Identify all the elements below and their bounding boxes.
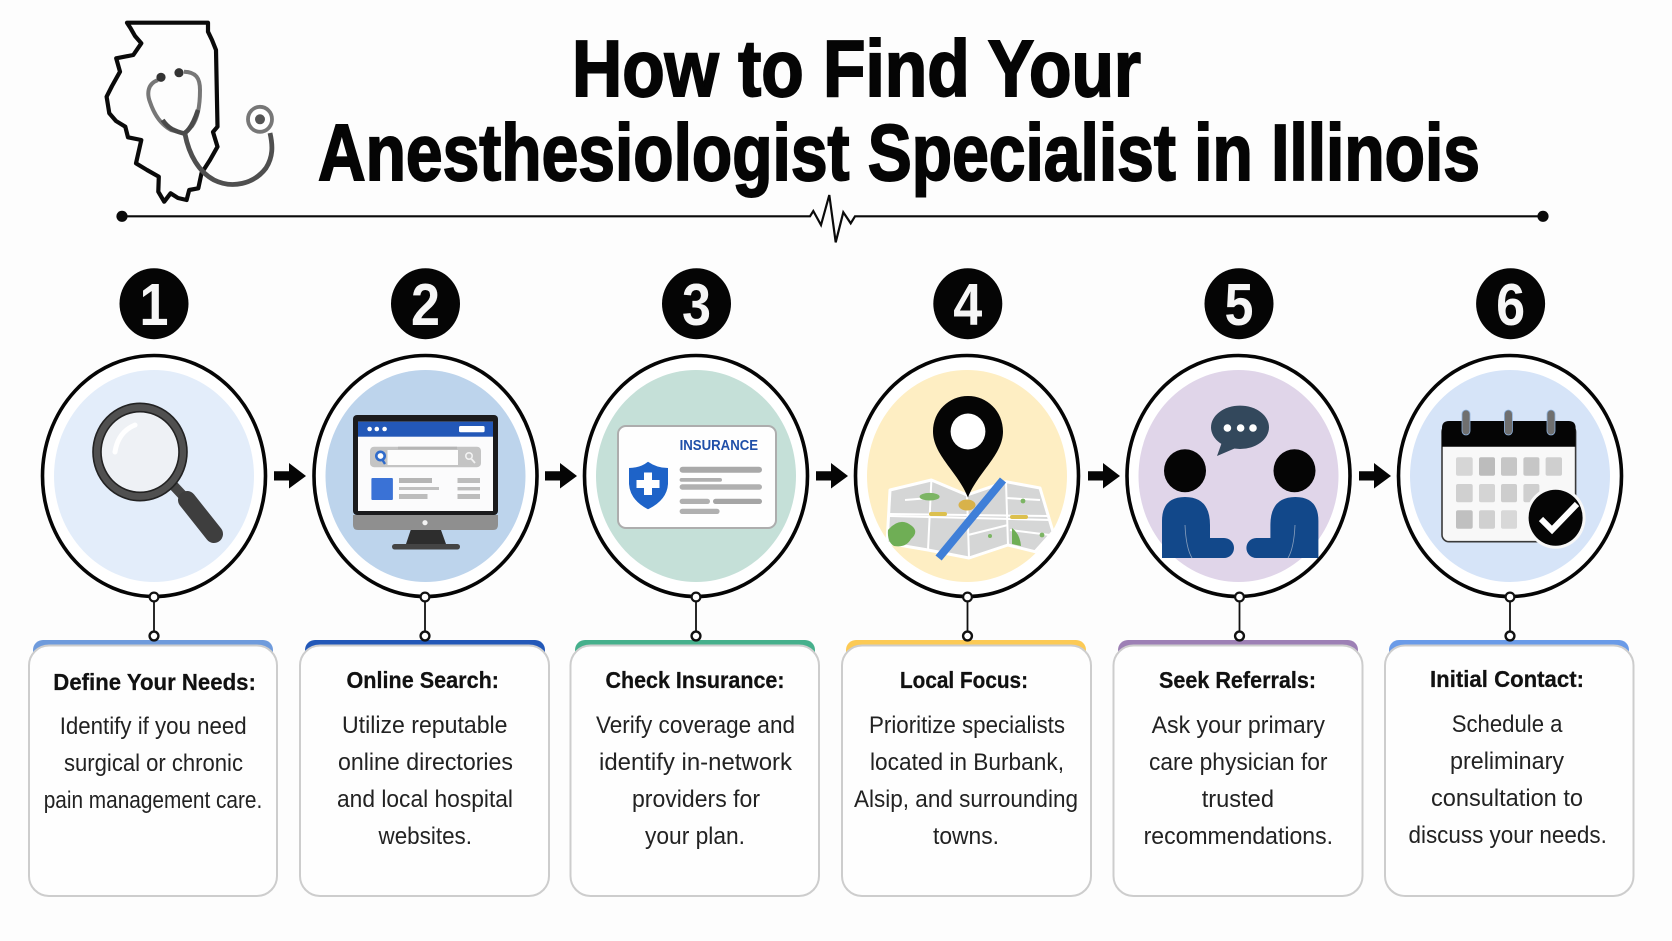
panel: seek referrals: Seek Referrals: [1159, 667, 1316, 693]
step number 6 [1476, 268, 1545, 339]
panel: check insurance: identify in-network [599, 749, 793, 776]
icon: location pin [933, 396, 1003, 498]
connector 4 [963, 593, 972, 640]
arrow 2 to 3 [545, 463, 577, 488]
icon: speech bubble [1211, 406, 1269, 456]
arrow 4 to 5 [1088, 463, 1120, 488]
panel: define your needs: surgical or chronic [64, 750, 243, 777]
panel: initial contact: preliminary [1450, 748, 1564, 775]
arrow 1 to 2 [274, 463, 306, 488]
heartbeat divider [116, 195, 1549, 242]
step number 4: 4 [953, 272, 982, 338]
connector 2 [421, 593, 429, 640]
panel: local focus: Alsip, and surrounding [854, 786, 1078, 813]
panel: check insurance: Verify coverage and [596, 712, 795, 739]
panel: initial contact: Schedule a [1452, 711, 1563, 738]
panel: initial contact: discuss your needs. [1408, 822, 1607, 849]
step circle 6: calendar [1398, 356, 1622, 596]
panel: local focus: Prioritize specialists [869, 712, 1065, 739]
panel: online search: Utilize reputable [342, 712, 508, 739]
step circle 5: referrals conversation [1127, 356, 1350, 596]
step circle 3: insurance card [584, 356, 808, 596]
step number 3: 3 [682, 272, 711, 338]
step number 2: 2 [411, 272, 440, 338]
panel: check insurance: Check Insurance: [606, 667, 784, 693]
connector 6 [1506, 593, 1514, 640]
icon: folded map [887, 480, 1053, 558]
connector 5 [1235, 593, 1244, 640]
step circle 4: map pin [856, 356, 1078, 596]
icon: Illinois outline with stethoscope [107, 23, 272, 202]
panel: online search: websites. [378, 823, 472, 850]
panel: define your needs [29, 640, 277, 896]
step number 6: 6 [1496, 272, 1525, 338]
arrow 5 to 6 [1359, 463, 1391, 488]
icon: desktop monitor with search page [353, 415, 498, 550]
panel: local focus [842, 640, 1091, 896]
panel: check insurance [570, 640, 819, 896]
connector 3 [692, 593, 700, 640]
panel: online search [300, 640, 549, 896]
panel: define your needs: pain management care. [44, 787, 262, 814]
panel: define your needs: Identify if you need [60, 713, 247, 740]
panel: online search: and local hospital [337, 786, 513, 813]
step number 1: 1 [140, 272, 168, 338]
panel: online search: Online Search: [346, 667, 499, 693]
connector 1 [150, 593, 158, 640]
panel: initial contact [1385, 640, 1634, 896]
step circle 1: magnifying glass [42, 356, 266, 596]
step number 4 [933, 268, 1002, 339]
panel: seek referrals: trusted [1202, 786, 1274, 813]
panel: seek referrals: Ask your primary [1152, 712, 1325, 739]
panel: seek referrals: care physician for [1149, 749, 1328, 776]
panel: initial contact: consultation to [1431, 785, 1583, 812]
arrow 3 to 4 [816, 463, 848, 488]
step number 3 [662, 268, 731, 339]
panel: seek referrals: recommendations. [1144, 823, 1333, 850]
icon: insurance card [618, 426, 776, 528]
step number 2 [391, 268, 460, 339]
step number 5: 5 [1224, 272, 1254, 338]
step circle 2: computer [314, 356, 537, 596]
panel: online search: online directories [338, 749, 513, 776]
panel: seek referrals [1114, 640, 1362, 896]
icon: two seated people [1162, 449, 1318, 558]
icon: insurance card: INSURANCE [680, 438, 758, 454]
panel: local focus: located in Burbank, [870, 749, 1064, 776]
panel: define your needs: Define Your Needs: [53, 669, 256, 695]
step number 5 [1204, 268, 1274, 339]
panel: check insurance: providers for [632, 786, 760, 813]
title [318, 24, 1480, 197]
panel: check insurance: your plan. [645, 823, 745, 850]
panel: local focus: Local Focus: [900, 667, 1028, 693]
icon: calendar with check [1442, 410, 1586, 549]
step number 1 [120, 268, 188, 339]
panel: initial contact: Initial Contact: [1430, 666, 1584, 692]
icon: magnifying glass [93, 403, 214, 534]
panel: local focus: towns. [933, 823, 999, 850]
title: How to Find Your [572, 24, 1141, 113]
